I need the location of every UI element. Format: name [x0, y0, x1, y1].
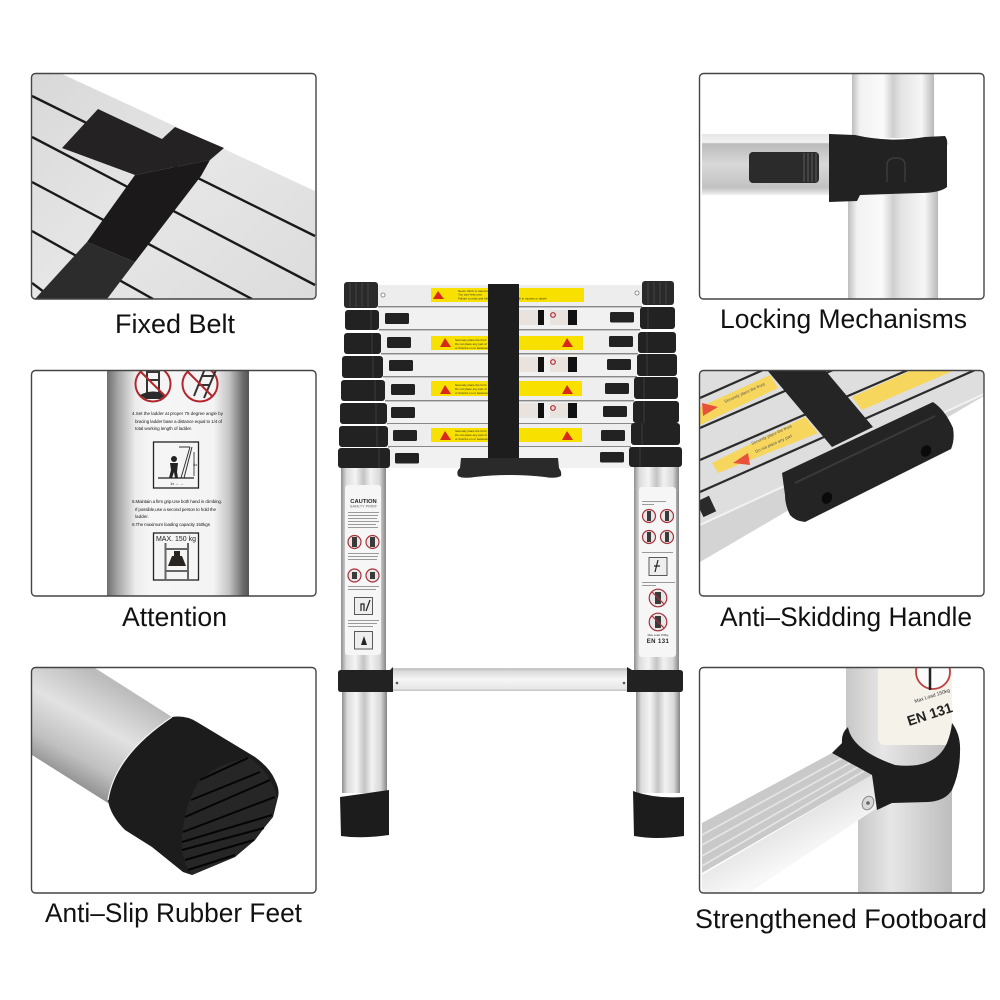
panel: anti-slip rubber feet	[32, 668, 316, 893]
carrying handle	[457, 458, 561, 478]
footboard clamp left	[338, 667, 393, 692]
label: attention: Attention	[122, 602, 227, 632]
footboard clamp right	[627, 667, 683, 692]
left sticker: caution: SAFETY PRINT	[350, 504, 378, 508]
instruction text: 4.Set the ladder at proper 75 degree angle by	[132, 411, 224, 416]
ladder rung 5	[341, 377, 678, 402]
instruction text: bracing ladder base a distance equal to 1/4 of	[135, 419, 223, 424]
clamp	[829, 134, 947, 202]
instruction text: 6.The maximum loading capacity 150kgs	[132, 522, 211, 527]
rubber foot	[108, 717, 279, 875]
ladder rung 1: Never climb or stand on	[458, 289, 490, 293]
arch mark	[887, 158, 905, 182]
label: strengthened footboard: Strengthened Footboard	[695, 904, 987, 934]
instruction text	[132, 411, 224, 527]
label: locking mechanisms: Locking Mechanisms	[720, 304, 967, 334]
ladder rung 3: or thumbs on or between	[455, 346, 489, 350]
right lower tube	[636, 692, 680, 793]
belt strap	[767, 370, 873, 447]
footboard rung	[393, 668, 627, 691]
ladder rung 2	[345, 307, 675, 330]
ladder rung 1	[344, 281, 674, 308]
yellow labels: Securely place the front	[750, 423, 793, 446]
icon: ladder angle: 4x	[193, 462, 197, 467]
icon: ladder angle	[154, 442, 198, 488]
belt strap	[35, 109, 224, 299]
clamp	[832, 723, 960, 810]
central telescopic ladder	[338, 281, 684, 838]
ladder rung 3: Do not place any part of	[455, 342, 487, 346]
ladder rung 3	[344, 331, 676, 354]
ladder rung 7: Do not place any part of	[455, 433, 487, 437]
ladder rung 7	[339, 423, 680, 448]
sticker: EN 131	[905, 699, 955, 729]
label: anti-skidding handle: Anti–Skidding Handle	[720, 602, 972, 632]
yellow labels: Securely place the front	[723, 381, 766, 404]
label: anti-slip rubber feet: Anti–Slip Rubber Feet	[45, 898, 303, 928]
right sticker: EN 131	[639, 487, 676, 657]
instruction text: 5.Maintain a firm grip.Use both hand in climbing.	[132, 499, 222, 504]
right sticker: EN 131: Max Load 150kg	[648, 633, 669, 637]
right upper tube	[634, 465, 679, 670]
ladder rung 7: Securely place the front	[455, 429, 487, 433]
ladder rung 7: or thumbs on or between	[455, 437, 489, 441]
panel: fixed belt	[32, 74, 316, 299]
bolt	[862, 796, 874, 810]
ladder rung 6	[340, 401, 679, 424]
left upper tube	[341, 465, 386, 670]
left lower tube	[342, 692, 387, 793]
sticker	[878, 668, 953, 745]
ladder rung 3: Securely place the front	[455, 338, 487, 342]
right sticker: EN 131: EN 131	[647, 639, 669, 645]
lock button	[749, 152, 819, 183]
prohibition icons	[136, 366, 218, 402]
icon: max load	[154, 533, 198, 580]
instruction text: total working length of ladder.	[135, 426, 192, 431]
left rubber foot	[340, 790, 389, 837]
right rubber foot	[633, 791, 684, 838]
ladder rung 1: Failure to read and follow this ladder may result in injuries or death	[458, 296, 547, 300]
icon: ladder angle: 1x ←→	[170, 481, 183, 486]
ladder rung 5: Do not place any part of	[455, 387, 487, 391]
left sticker: caution: CAUTION	[350, 499, 377, 505]
ladder rung 1: You can hear your	[458, 292, 482, 296]
instruction text: If possible,use a second person to hold the	[135, 507, 216, 512]
carrying belt	[488, 284, 519, 459]
ladder rung 8	[338, 447, 682, 468]
handle	[782, 402, 954, 522]
instruction text: ladder.	[135, 514, 149, 519]
ladder rung 5: Securely place the front	[455, 383, 487, 387]
footboard	[702, 753, 877, 892]
yellow labels: Do not place any part	[754, 433, 794, 454]
icon: max load: MAX. 150 kg	[156, 536, 196, 543]
yellow labels	[700, 370, 955, 473]
ladder rung 4	[342, 354, 677, 378]
panel: strengthened footboard	[700, 655, 984, 894]
left sticker: caution	[345, 485, 381, 655]
label: fixed belt: Fixed Belt	[115, 309, 236, 339]
panel: attention	[32, 366, 316, 596]
ladder rung 5: or thumbs on or between	[455, 391, 489, 395]
panel: locking mechanisms	[700, 74, 984, 300]
sticker: Max Load 150kg	[914, 688, 951, 705]
panel: anti-skidding handle	[696, 370, 984, 596]
